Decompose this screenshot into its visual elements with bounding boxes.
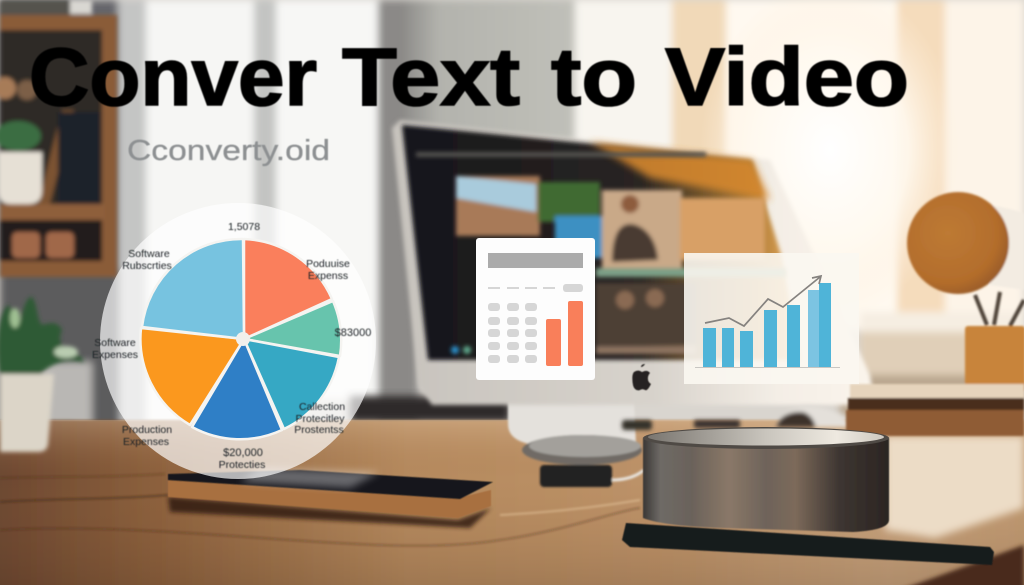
pie labels: Protecties (219, 459, 265, 471)
title (29, 32, 909, 123)
potted plant (0, 297, 84, 452)
pie labels: 1,5078 (228, 221, 260, 233)
monitor stand and puck (508, 400, 644, 487)
screen highlight band (590, 142, 770, 200)
lamp, cup and books on the right (846, 192, 1024, 436)
pie labels: Poduuise (306, 258, 350, 270)
apple logo (632, 364, 651, 390)
pie labels: Expenss (308, 270, 348, 282)
bar and line chart card (684, 253, 859, 384)
pie labels: Software (94, 337, 136, 349)
pie labels: Protecitley (295, 413, 345, 425)
pen on desk (622, 523, 994, 565)
pie labels (92, 221, 371, 471)
calculator keys (488, 284, 583, 363)
pie labels: Rubscrties (122, 260, 172, 272)
notebook cover (168, 470, 493, 499)
pie labels: Software (128, 248, 170, 260)
mouse and small desk items (622, 406, 852, 430)
pie labels: Production (122, 424, 172, 436)
chart bars (703, 283, 831, 367)
dark front corner of desk (900, 545, 1024, 585)
window panes and wall (0, 0, 1024, 440)
dark zone behind monitor stand (350, 396, 510, 422)
trend line with arrow (705, 276, 821, 326)
bookshelf (0, 0, 117, 277)
title: Conver (29, 32, 317, 123)
metal cylinder speaker (643, 427, 889, 532)
sunlight glow (700, 0, 960, 320)
title: Video (665, 32, 909, 123)
pie labels: $83000 (335, 327, 371, 339)
notebook pages edge (168, 480, 491, 518)
subtitle watermark: Cconverty.oid (127, 135, 330, 167)
wood grain (0, 474, 640, 546)
notebook shadow (168, 497, 491, 528)
chart baseline (695, 367, 840, 368)
calculator orange bars (546, 301, 583, 366)
calculator display (488, 253, 583, 268)
title: to (551, 32, 637, 123)
pie labels: Prostentss (294, 424, 344, 436)
pie labels: Expenses (123, 436, 169, 448)
title: Text (342, 32, 520, 123)
screen (402, 125, 800, 360)
sunlit area of desk (885, 436, 1024, 538)
notebook on desk (168, 468, 493, 528)
pie hub (236, 332, 250, 346)
pie labels: Callection (299, 401, 345, 413)
video thumbnails (416, 152, 786, 354)
desk surface (0, 420, 1024, 585)
translucent disc (100, 203, 376, 479)
pie slices (140, 239, 341, 439)
desktop monitor (392, 120, 875, 487)
calculator icon (476, 238, 595, 380)
monitor body (392, 120, 875, 405)
pie chart panel (92, 203, 376, 479)
pie labels: Expenses (92, 349, 138, 361)
pie labels: $20,000 (223, 447, 263, 459)
glare over cover (240, 468, 380, 488)
